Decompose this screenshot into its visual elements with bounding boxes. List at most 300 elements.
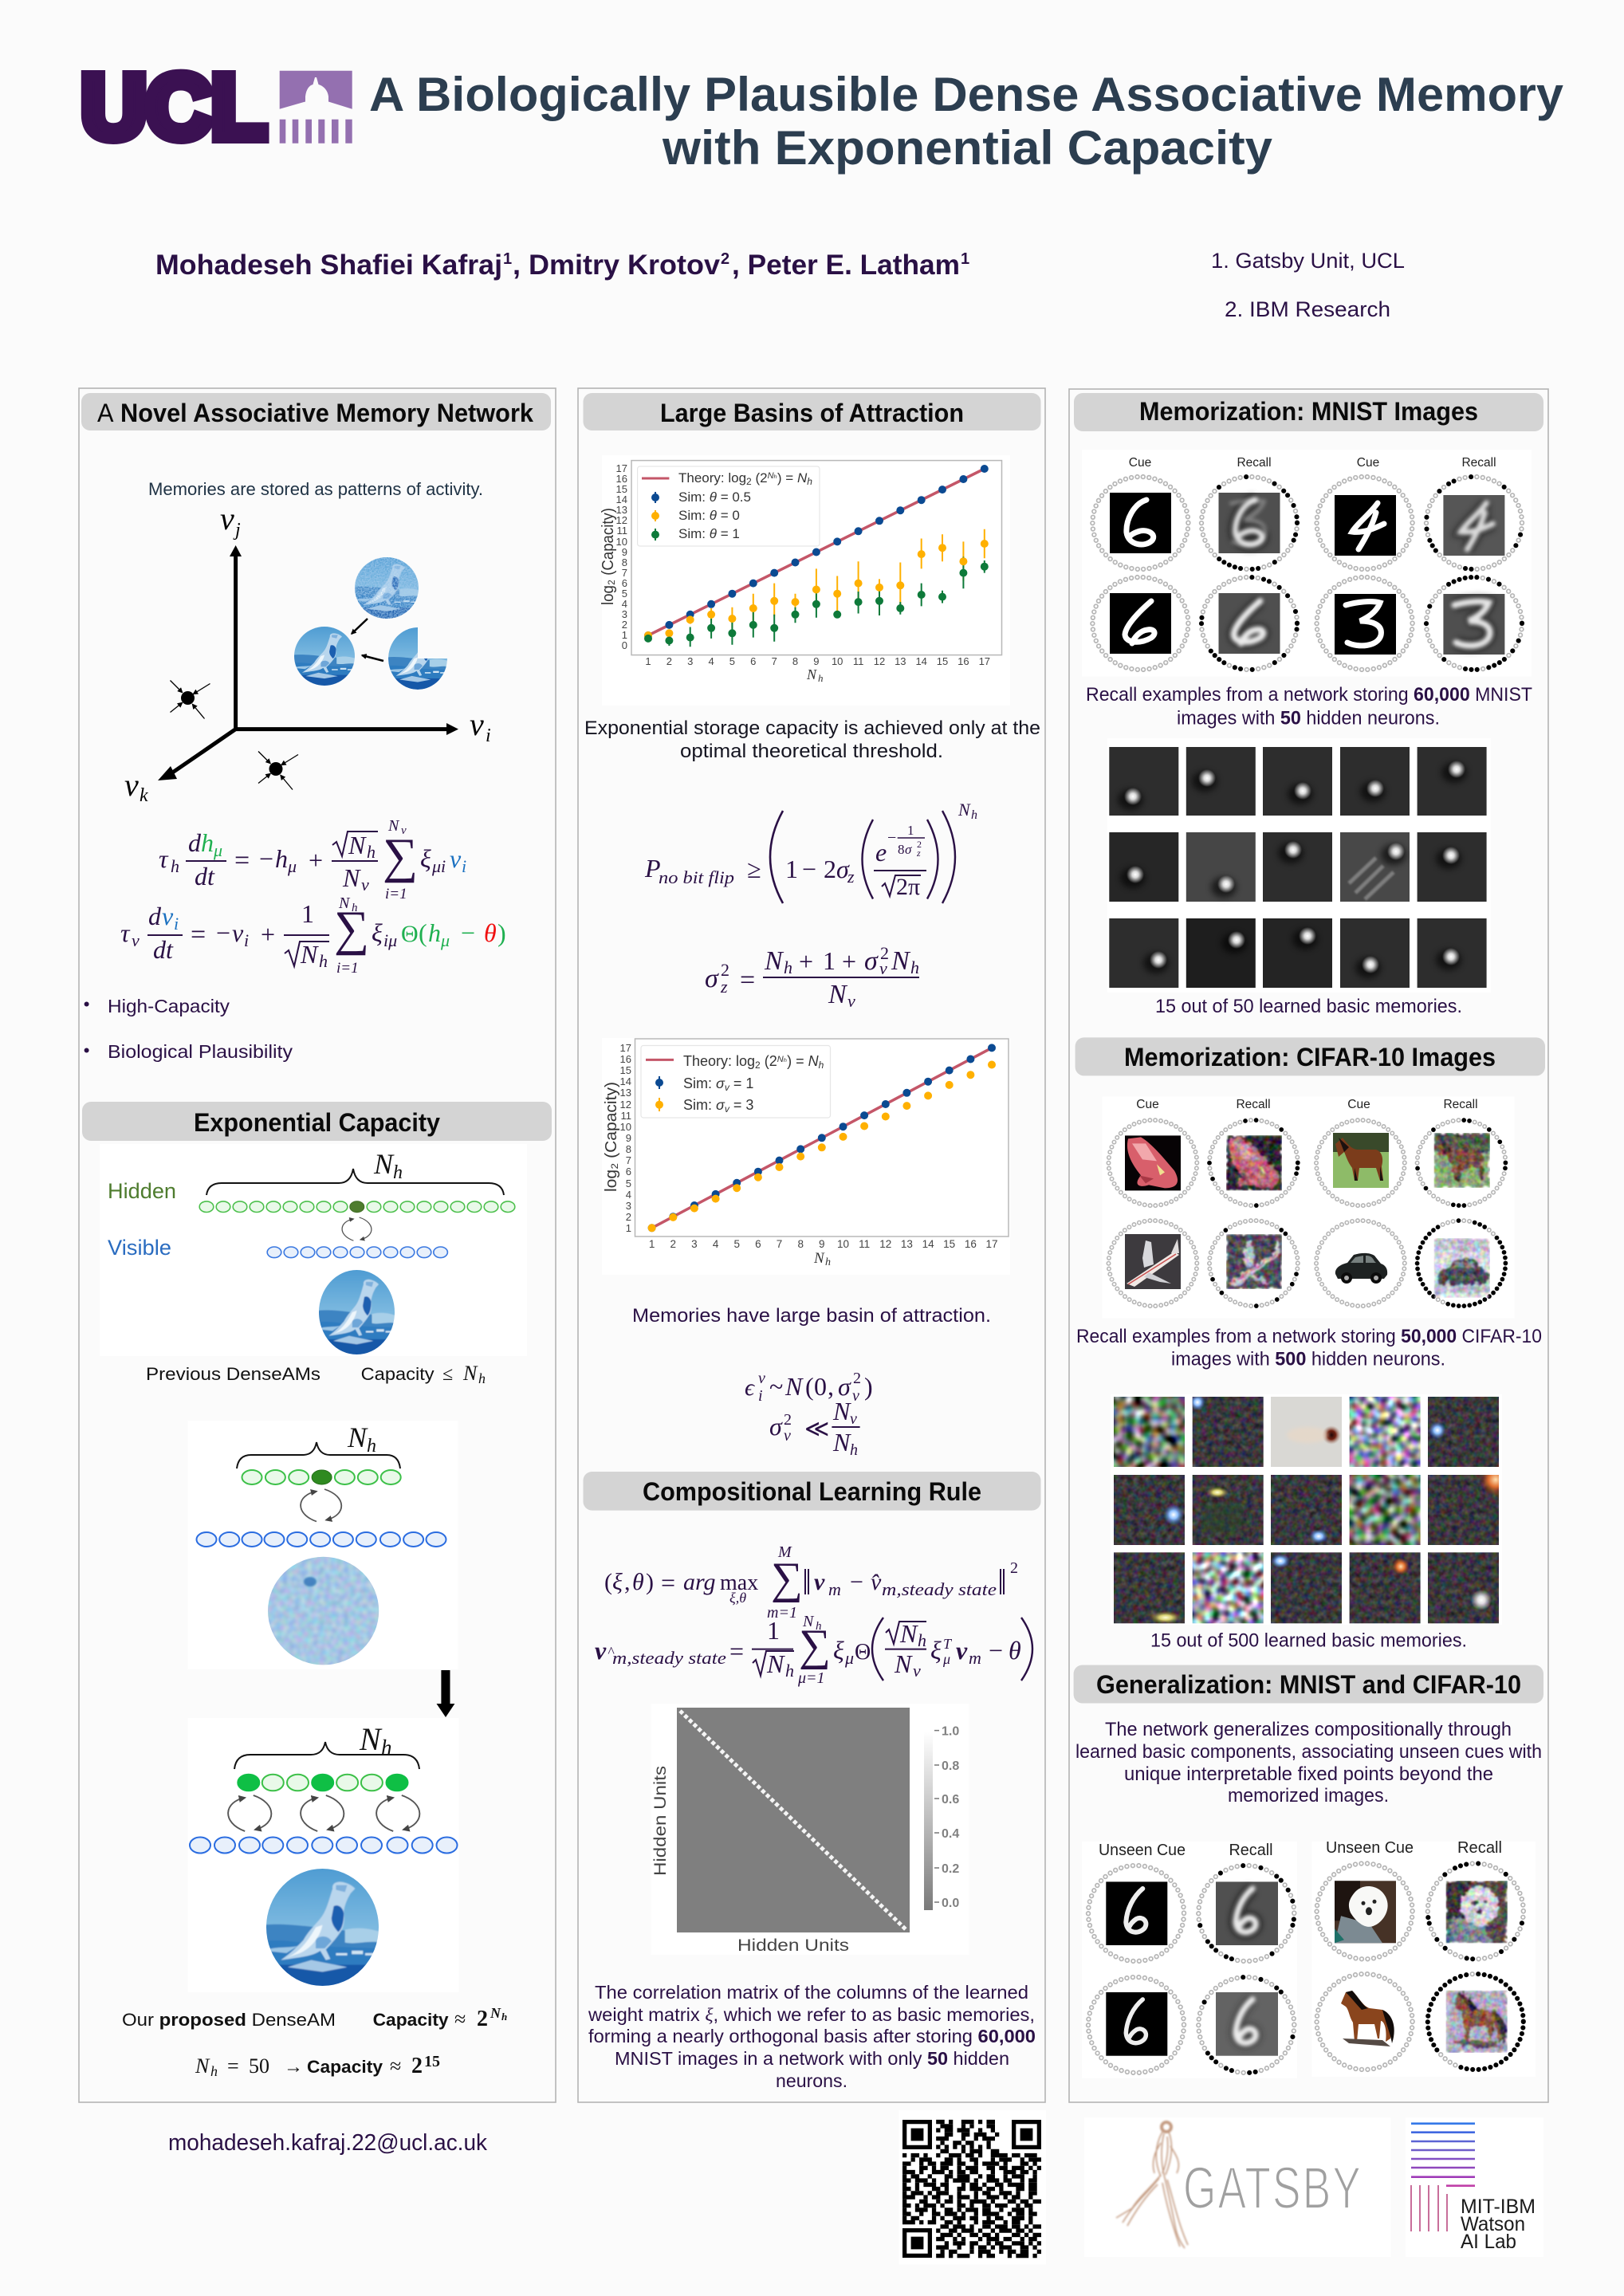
chart: capacity vs threshold: 16 — [616, 473, 627, 485]
caption: capacity example: ≈ — [390, 2054, 401, 2078]
chart: capacity vs threshold: Sim: θ = 0.5 — [678, 489, 751, 505]
heading: Memorization MNIST — [1074, 393, 1543, 431]
equation: noise distribution: h — [850, 1441, 858, 1459]
caption: previous DenseAMs: Previous DenseAMs — [146, 1364, 320, 1384]
chart: capacity vs noise: 4 — [713, 1238, 719, 1250]
text: CIFAR recall caption: Recall examples from a network storing 50,000 CIFAR-10 — [1076, 1326, 1542, 1347]
equation: learning objective: arg — [683, 1569, 716, 1595]
chart: capacity vs noise: Nₕ — [777, 1055, 787, 1064]
chart: capacity vs threshold: h — [807, 476, 812, 487]
equation: learning objective: M — [777, 1543, 792, 1561]
logo: Gatsby: GATSBY — [1183, 2155, 1363, 2221]
chart: capacity vs threshold: ) = — [777, 470, 797, 486]
caption: capacity example: 50 — [249, 2054, 269, 2078]
caption: capacity example — [195, 2053, 440, 2079]
chart: capacity vs noise: 1 — [649, 1238, 655, 1250]
equation: sigma z squared: 2 — [880, 943, 889, 963]
chart: capacity vs threshold: 17 — [979, 655, 990, 667]
chart: capacity vs threshold: 0 — [622, 639, 627, 651]
text: correlation caption: MNIST images in a network with only 50 hidden — [615, 2048, 1009, 2069]
chart: capacity vs threshold: 8 — [792, 655, 798, 667]
icon: recalled memory — [293, 626, 356, 686]
equation: no bit flip probability: − — [802, 855, 816, 883]
heading: Exponential Capacity: Exponential Capacity — [194, 1108, 440, 1137]
chart: correlation matrix: 1.0 — [942, 1725, 959, 1739]
chart: correlation matrix: 0.4 — [942, 1827, 959, 1841]
panel: left column — [79, 388, 556, 2102]
equation: visible dynamics: 1 — [301, 899, 314, 928]
heading: Memorization CIFAR: Memorization: CIFAR-10 Images — [1124, 1043, 1496, 1071]
panel: MNIST recall examples: Recall — [1237, 456, 1272, 470]
text: generalization description: The network generalizes compositionally through — [1105, 1719, 1512, 1740]
axes diagram: j — [233, 520, 241, 541]
equation: sigma z squared — [705, 943, 919, 1011]
caption: capacity example: → — [284, 2057, 303, 2078]
chart: capacity vs noise: 11 — [859, 1238, 870, 1250]
heading: Memorization CIFAR — [1075, 1037, 1545, 1075]
equation: learning objective: m — [828, 1579, 841, 1599]
diagram: single hidden unit: h — [367, 1436, 376, 1457]
chart: capacity vs threshold: Theory: log — [678, 470, 746, 486]
equation: noise distribution: N — [784, 1372, 804, 1401]
chart: capacity vs threshold: 3 — [687, 655, 693, 667]
equation: visible dynamics: − — [216, 918, 230, 947]
chart: capacity vs noise: log₂ (Capacity) — [603, 1082, 620, 1192]
chart: capacity vs threshold: Sim: θ = 0 — [678, 508, 740, 523]
chart: capacity vs threshold: (2 — [752, 470, 768, 486]
equation: steady state: h — [918, 1630, 926, 1650]
equation: visible dynamics: h — [428, 918, 441, 947]
chart: capacity vs noise: h — [819, 1060, 824, 1071]
chart: capacity vs threshold: 11 — [853, 655, 863, 667]
chart: capacity vs threshold: 10 — [832, 655, 843, 667]
panel: MNIST recall examples: Cue — [1129, 456, 1151, 470]
panel: CIFAR basic memories — [1111, 1394, 1512, 1625]
diagram: previous DenseAMs: h — [393, 1162, 403, 1183]
text: MNIST recall caption — [1086, 684, 1532, 729]
icon: noisy memory — [353, 556, 420, 620]
equation: steady state: h — [816, 1620, 821, 1633]
chart: capacity vs threshold: Sim: θ = 1 — [678, 526, 740, 541]
equation: steady state: ξ — [833, 1636, 844, 1665]
equation: steady state: v — [956, 1636, 968, 1665]
equation: visible dynamics: v — [132, 930, 140, 950]
chart: capacity vs threshold: N — [806, 666, 817, 682]
chart: capacity vs noise: v — [725, 1082, 730, 1093]
chart: capacity vs threshold: 14 — [616, 493, 627, 505]
QR code — [899, 2110, 1046, 2265]
equation: learning objective: v — [814, 1569, 825, 1595]
chart: capacity vs noise: 5 — [733, 1238, 740, 1250]
text: correlation caption: The correlation matrix of the columns of the learned — [595, 1982, 1028, 2003]
chart: capacity vs noise: ) = — [787, 1053, 808, 1069]
chart: capacity vs noise: 7 — [626, 1154, 631, 1166]
equation: learning objective: v̂ — [871, 1569, 882, 1595]
chart: capacity vs threshold: h — [818, 672, 823, 684]
chart: capacity vs noise: 13 — [901, 1238, 913, 1250]
chart: capacity vs threshold: 2 — [746, 476, 752, 487]
diagram: single hidden unit: N — [347, 1421, 368, 1453]
chart: capacity vs noise: = 3 — [729, 1097, 753, 1113]
text: generalization description: unique interpretable fixed points beyond the — [1124, 1763, 1493, 1785]
panel: MNIST recall examples: Cue — [1357, 456, 1379, 470]
axes diagram: i — [486, 725, 491, 746]
equation: hidden dynamics: N — [387, 817, 400, 835]
panel: right column — [1069, 389, 1548, 2102]
equation: steady state: 1 — [767, 1616, 780, 1645]
equation: no bit flip probability: no bit flip — [659, 867, 734, 887]
equation: hidden dynamics: d — [188, 828, 202, 857]
equation: no bit flip probability: N — [957, 800, 971, 820]
text: CIFAR basis caption: 15 out of 500 learned basic memories. — [1150, 1630, 1467, 1652]
heading: Generalization: Generalization: MNIST and CIFAR-10 — [1096, 1670, 1521, 1699]
chart: capacity vs noise: Theory: log — [683, 1053, 755, 1069]
equation: steady state: θ — [1009, 1636, 1021, 1665]
chart: capacity vs noise: 3 — [691, 1238, 698, 1250]
equation: noise distribution: ) — [864, 1372, 873, 1401]
text: basin caption: Memories have large basin of attraction. — [632, 1305, 991, 1327]
equation: sigma z squared: + — [799, 947, 813, 976]
diagram: previous DenseAMs: Visible — [108, 1236, 171, 1260]
caption: capacity example: 15 — [424, 2053, 440, 2070]
equation: noise distribution: v — [852, 1387, 859, 1405]
equation: hidden dynamics: μi — [431, 856, 446, 876]
equation: hidden dynamics: i=1 — [385, 886, 407, 902]
chart: capacity vs noise: 9 — [819, 1238, 825, 1250]
panel: CIFAR recall examples: Recall — [1443, 1098, 1478, 1111]
equation: hidden dynamics: h — [201, 828, 214, 857]
equation: noise distribution: i — [758, 1387, 763, 1405]
chart: capacity vs threshold: 4 — [708, 655, 714, 667]
equation: learning objective: m,steady state — [882, 1579, 997, 1599]
chart: capacity vs noise: 3 — [626, 1200, 631, 1212]
chart: capacity vs noise: 16 — [620, 1053, 631, 1065]
equation: hidden dynamics: v — [401, 824, 407, 837]
chart: capacity vs threshold: 12 — [874, 655, 885, 667]
equation: sigma z squared: h — [784, 957, 792, 977]
caption: proposed DenseAM: h — [501, 2011, 507, 2023]
panel: MNIST generalization: Unseen Cue — [1099, 1842, 1186, 1859]
equation: hidden dynamics: h — [275, 844, 288, 873]
equation: sigma z squared: = — [740, 965, 755, 995]
equation: no bit flip probability — [644, 800, 977, 903]
chart: capacity vs noise: Sim: σ — [683, 1075, 725, 1091]
equation: hidden dynamics: ∑ — [383, 829, 418, 883]
heading: Compositional Learning Rule: Compositional Learning Rule — [643, 1477, 981, 1506]
chart: capacity vs noise: h — [825, 1256, 831, 1268]
icon: attractor point 1 — [171, 681, 210, 719]
equation: visible dynamics: i=1 — [336, 960, 359, 977]
chart: correlation matrix: 0.6 — [942, 1793, 959, 1807]
equation: noise distribution: σ — [769, 1412, 783, 1441]
chart: capacity vs noise: N — [813, 1250, 825, 1267]
affiliations: 1. Gatsby Unit, UCL — [1211, 249, 1405, 273]
chart: capacity vs noise: 14 — [922, 1238, 934, 1250]
chart: capacity vs threshold: 7 — [622, 567, 627, 579]
chart: capacity vs threshold: 12 — [616, 514, 627, 526]
chart: capacity vs threshold: 4 — [622, 598, 627, 610]
panel: MNIST basic memories — [1107, 738, 1491, 993]
equation: visible dynamics: i — [244, 930, 249, 950]
equation: sigma z squared: 1 — [823, 946, 836, 975]
chart: capacity vs noise: 17 — [620, 1042, 631, 1054]
axes diagram: k — [140, 785, 148, 806]
chart: capacity vs noise: 17 — [985, 1238, 998, 1250]
equation: visible dynamics: iμ — [383, 930, 397, 950]
equation: no bit flip probability: 1 — [907, 823, 914, 838]
equation: sigma z squared: h — [910, 957, 919, 977]
caption: capacity example: = — [227, 2054, 239, 2078]
affiliations: 2. IBM Research — [1225, 297, 1390, 321]
equation: hidden dynamics — [159, 817, 466, 902]
chart: capacity vs threshold: 1 — [645, 655, 651, 667]
heading: Exponential Capacity — [82, 1102, 552, 1141]
caption: capacity example: N — [195, 2054, 210, 2078]
chart: capacity vs threshold: 6 — [750, 655, 756, 667]
chart: capacity vs noise: 4 — [626, 1189, 631, 1201]
diagram: previous DenseAMs — [100, 1144, 527, 1356]
caption: capacity example: Capacity — [307, 2057, 383, 2077]
equation: sigma z squared: v — [847, 991, 855, 1011]
equation: no bit flip probability: P — [644, 854, 661, 883]
panel: middle column — [578, 388, 1045, 2102]
text: MNIST recall caption: images with 50 hidden neurons. — [1177, 708, 1440, 729]
equation: visible dynamics: h — [319, 951, 328, 971]
equation: learning objective: − — [850, 1569, 863, 1595]
equation: hidden dynamics: v — [450, 844, 462, 873]
equation: hidden dynamics: v — [361, 875, 369, 894]
heading: Large Basins of Attraction — [584, 393, 1041, 431]
icon: attractor point 2 — [258, 751, 298, 789]
equation: hidden dynamics: h — [171, 856, 179, 876]
affiliations — [1211, 249, 1405, 321]
equation: no bit flip probability: σ — [905, 842, 912, 857]
caption: proposed DenseAM: N — [490, 2005, 501, 2021]
equation: noise distribution — [745, 1370, 873, 1459]
equation: sigma z squared: N — [828, 980, 848, 1009]
equation: no bit flip probability: 2 — [824, 855, 836, 883]
chart: capacity vs threshold: 13 — [895, 655, 906, 667]
chart: capacity vs noise: 2 — [755, 1060, 761, 1071]
equation: no bit flip probability: σ — [836, 855, 850, 883]
text: correlation caption — [588, 1982, 1036, 2091]
equation: no bit flip probability: 1 — [785, 855, 798, 883]
panel: MNIST recall examples: Recall — [1461, 456, 1496, 470]
equation: learning objective: m=1 — [767, 1604, 797, 1622]
chart: capacity vs threshold: 8 — [622, 556, 627, 568]
equation: sigma z squared: σ — [705, 964, 719, 993]
logo: Gatsby — [1084, 2117, 1390, 2257]
chart: capacity vs noise: 15 — [620, 1064, 631, 1076]
panel: MNIST recall examples — [1082, 450, 1532, 676]
equation: noise distribution: v — [758, 1370, 765, 1387]
equation: hidden dynamics: μ — [287, 856, 297, 876]
chart: capacity vs threshold — [600, 455, 1010, 706]
heading: A Novel Associative Memory Network: A Novel Associative Memory Network — [97, 399, 533, 427]
text: generalization description: memorized images. — [1228, 1785, 1389, 1807]
caption: capacity example: 2 — [411, 2054, 423, 2078]
chart: capacity vs threshold: 11 — [617, 525, 627, 537]
arrow: down to proposed model — [437, 1670, 454, 1717]
equation: steady state: ∑ — [799, 1621, 831, 1670]
chart: capacity vs noise: 5 — [626, 1177, 631, 1189]
authors: , Peter E. Latham — [732, 250, 960, 281]
bullet list: High-Capacity — [108, 996, 230, 1016]
equation: hidden dynamics: N — [342, 863, 361, 892]
equation: visible dynamics: dt — [153, 935, 174, 964]
equation: noise distribution: N — [832, 1397, 851, 1425]
chart: capacity vs noise: v — [725, 1103, 730, 1115]
caption: previous DenseAMs: ≤ — [442, 1364, 453, 1385]
equation: sigma z squared: + — [842, 947, 856, 976]
equation: steady state: m — [969, 1648, 981, 1668]
equation: visible dynamics: ξ — [372, 918, 383, 947]
equation: no bit flip probability: h — [971, 808, 977, 822]
equation: noise distribution: ϵ — [745, 1374, 756, 1401]
panel: CIFAR recall examples — [1103, 1096, 1515, 1318]
equation: visible dynamics: d — [148, 902, 162, 930]
UCL logo — [81, 57, 352, 157]
equation: steady state: ξ — [930, 1636, 942, 1665]
equation: steady state: = — [729, 1637, 744, 1665]
equation: hidden dynamics: = — [234, 846, 250, 875]
title — [369, 68, 1564, 175]
equation: no bit flip probability: z — [847, 867, 855, 887]
equation: steady state: N — [802, 1613, 815, 1630]
panel: MNIST generalization — [1082, 1842, 1297, 2078]
text: email: mohadeseh.kafraj.22@ucl.ac.uk — [168, 2130, 487, 2156]
bullet list: Biological Plausibility — [108, 1041, 293, 1062]
chart: capacity vs threshold: 7 — [772, 655, 777, 667]
equation: noise distribution: ( — [805, 1372, 814, 1401]
diagram: proposed DenseAM: h — [381, 1736, 392, 1759]
equation: hidden dynamics: μ — [213, 840, 222, 860]
chart: capacity vs noise: 12 — [620, 1099, 631, 1111]
equation: visible dynamics: τ — [120, 918, 131, 947]
chart: capacity vs noise: = 1 — [729, 1075, 753, 1091]
equation: learning objective: ( — [604, 1569, 612, 1595]
chart: capacity vs threshold: 15 — [616, 483, 627, 495]
logo: MIT-IBM Watson AI Lab: MIT-IBM — [1461, 2196, 1536, 2218]
caption: proposed DenseAM: Capacity — [373, 2010, 449, 2030]
text: CIFAR recall caption — [1076, 1326, 1542, 1370]
equation: visible dynamics: ( — [419, 918, 427, 947]
caption: proposed DenseAM — [122, 2005, 507, 2031]
text: correlation caption: neurons. — [776, 2070, 847, 2091]
chart: correlation matrix: Hidden Units — [737, 1936, 849, 1955]
equation: sigma z squared: N — [764, 946, 784, 976]
heading: Memorization MNIST: Memorization: MNIST Images — [1139, 397, 1478, 426]
equation: visible dynamics: ∑ — [334, 902, 369, 956]
equation: noise distribution: N — [832, 1428, 851, 1457]
equation: hidden dynamics: + — [309, 846, 323, 875]
authors: 1 — [503, 250, 512, 268]
axes diagram: v — [470, 706, 484, 742]
chart: capacity vs threshold: 16 — [957, 655, 969, 667]
chart: capacity vs noise: 1 — [626, 1222, 631, 1234]
chart: capacity vs threshold: 13 — [616, 504, 627, 516]
equation: steady state: v — [595, 1636, 607, 1665]
logo: MIT-IBM Watson AI Lab: AI Lab — [1461, 2231, 1516, 2253]
arrows to the attractor — [352, 619, 383, 661]
equation: visible dynamics: v — [162, 902, 174, 930]
equation: visible dynamics — [120, 894, 506, 977]
chart: correlation matrix: Hidden Units — [651, 1766, 670, 1876]
equation: visible dynamics: i — [174, 914, 179, 934]
equation: visible dynamics: Θ — [401, 921, 419, 947]
chart: capacity vs noise — [602, 1038, 1010, 1275]
caption: previous DenseAMs: N — [462, 1362, 478, 1385]
diagram: previous DenseAMs: Hidden — [108, 1179, 176, 1203]
authors: 2 — [721, 250, 729, 268]
equation: steady state: N — [899, 1619, 918, 1648]
chart: capacity vs threshold: 17 — [616, 462, 627, 474]
text: MNIST basis caption: 15 out of 50 learned basic memories. — [1155, 996, 1462, 1017]
title: A Biologically Plausible Dense Associative Memory — [369, 68, 1564, 121]
chart: capacity vs threshold: 14 — [915, 655, 927, 667]
chart: capacity vs noise: 7 — [777, 1238, 782, 1250]
chart: correlation matrix: 0.8 — [942, 1759, 959, 1773]
chart: capacity vs noise: 6 — [755, 1238, 761, 1250]
equation: steady state — [595, 1613, 1032, 1687]
equation: steady state: μ=1 — [797, 1669, 825, 1687]
equation: sigma z squared: z — [720, 977, 728, 997]
equation: steady state: N — [894, 1649, 913, 1678]
panel: CIFAR recall examples: Recall — [1236, 1098, 1271, 1111]
equation: learning objective: θ — [632, 1569, 644, 1595]
text: generalization description — [1075, 1719, 1542, 1807]
UCL logo: UCL — [81, 57, 266, 157]
text: MNIST recall caption: Recall examples from a network storing 60,000 MNIST — [1086, 684, 1532, 706]
equation: steady state: h — [785, 1661, 794, 1681]
text: CIFAR recall caption: images with 500 hidden neurons. — [1171, 1349, 1445, 1370]
authors: Mohadeseh Shafiei Kafraj — [155, 250, 502, 281]
diagram: previous DenseAMs: N — [373, 1148, 395, 1180]
caption: capacity example: h — [210, 2063, 218, 2079]
equation: hidden dynamics: i — [462, 856, 466, 876]
chart: capacity vs noise: 2 — [670, 1238, 676, 1250]
chart: capacity vs threshold: 5 — [622, 588, 627, 600]
equation: steady state: ^ — [608, 1644, 615, 1660]
equation: noise distribution: v — [850, 1410, 857, 1428]
logo: MIT-IBM Watson AI Lab — [1406, 2117, 1543, 2257]
equation: noise distribution: 0 — [814, 1372, 827, 1401]
chart: capacity vs threshold: 2 — [667, 655, 672, 667]
equation: learning objective: ξ — [612, 1569, 623, 1595]
equation: learning objective: max — [720, 1571, 758, 1595]
diagram: single hidden unit — [188, 1421, 458, 1669]
equation: sigma z squared: σ — [864, 946, 879, 976]
authors — [155, 250, 969, 281]
heading: Compositional Learning Rule — [584, 1472, 1041, 1511]
equation: learning objective: = — [661, 1568, 675, 1597]
chart: capacity vs threshold: 1 — [622, 629, 627, 641]
equation: no bit flip probability: 2 — [917, 839, 922, 850]
equation: steady state: T — [943, 1636, 953, 1652]
equation: steady state: Θ — [855, 1640, 871, 1665]
equation: steady state: μ — [844, 1648, 854, 1668]
chart: capacity vs noise: 11 — [620, 1110, 631, 1122]
equation: no bit flip probability: 8 — [898, 842, 904, 857]
chart: capacity vs threshold: 3 — [622, 608, 627, 620]
chart: capacity vs noise: 10 — [837, 1238, 849, 1250]
chart: capacity vs threshold: 15 — [937, 655, 948, 667]
panel: CIFAR recall examples: Cue — [1136, 1098, 1159, 1111]
equation: hidden dynamics: dt — [195, 862, 215, 890]
equation: visible dynamics: − — [461, 918, 475, 947]
chart: capacity vs noise: 13 — [620, 1087, 631, 1099]
equation: visible dynamics: v — [232, 918, 244, 947]
